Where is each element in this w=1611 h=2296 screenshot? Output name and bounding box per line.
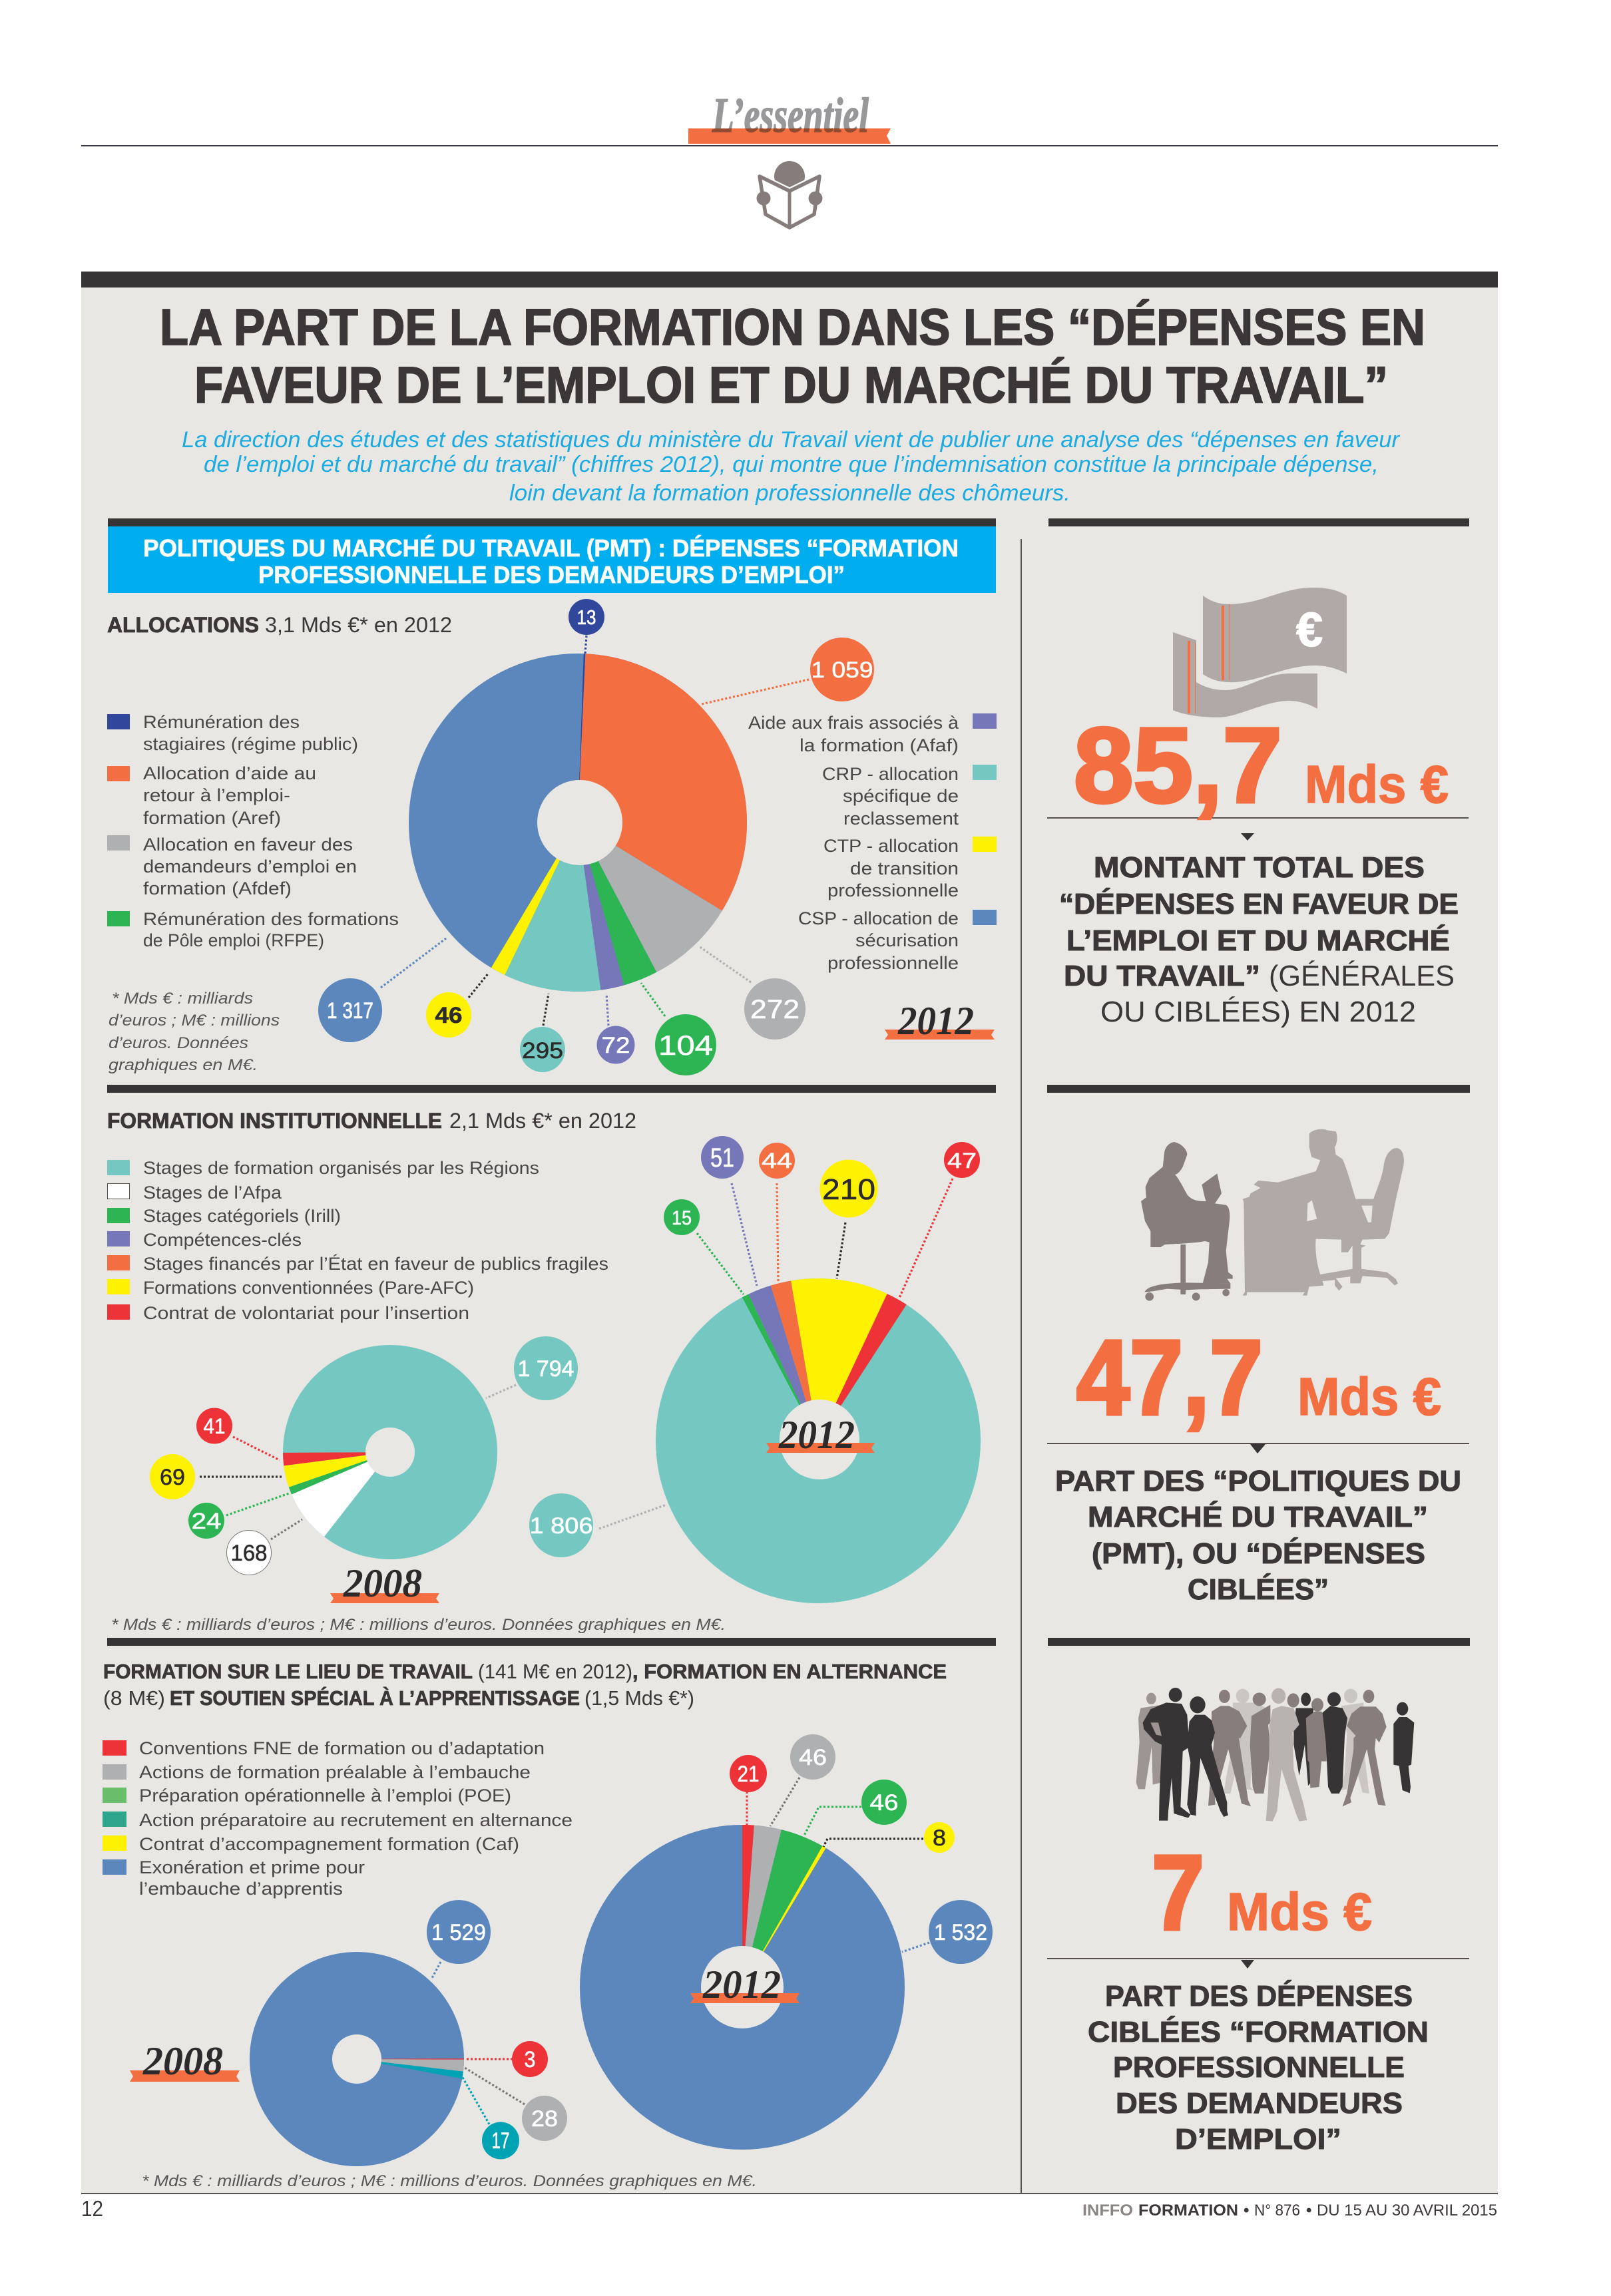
column divider — [1021, 539, 1022, 2193]
text: montant total — [1059, 851, 1459, 1028]
heading: formation sur le lieu de travail: (141 M€ en 2012) — [478, 1660, 632, 1683]
bubble: 8 — [823, 1822, 955, 1853]
footnote: allocations: d’euros ; M€ : millions — [109, 1012, 280, 1030]
bubble: 17 — [462, 2076, 519, 2159]
text: part des PMT: (PMT), OU “DÉPENSES — [1092, 1537, 1425, 1570]
bubble: 295: 295 — [522, 1038, 563, 1063]
intro text — [182, 427, 1401, 506]
legend: allocations right: professionnelle — [827, 880, 959, 900]
bubble: 15: 15 — [672, 1207, 692, 1229]
bubble: 46 green: 46 — [869, 1790, 899, 1816]
bubble: 1 532: 1 532 — [934, 1920, 987, 1945]
bubble: 13 — [569, 599, 604, 654]
bubble: 3 — [465, 2041, 548, 2077]
text: part des dépenses ciblées: PROFESSIONNELLE — [1113, 2051, 1405, 2084]
bubble: 46 grey: 46 — [799, 1745, 827, 1770]
footnote: institutionnelle: * Mds € : milliards d’euros ; M€ : millions d’euros. Données graphiques en M€. — [111, 1616, 726, 1634]
pie chart: formation institutionnelle 2012 — [656, 1278, 981, 1603]
bubble: 295 — [520, 994, 565, 1072]
legend: allocations right: CTP - allocation — [823, 836, 959, 856]
legend: formation institutionnelle: Stages financés par l’État en faveur de publics fragiles — [143, 1254, 608, 1274]
big number: 85,7 Mds €: Mds € — [1305, 755, 1449, 814]
heading: formation institutionnelle: FORMATION INSTITUTIONNELLE — [107, 1109, 442, 1133]
year tag: 2008 institutionnelle: 2008 — [343, 1561, 422, 1605]
bubble: 44: 44 — [762, 1149, 792, 1173]
icon: reader with open book — [756, 161, 823, 228]
legend: allocations right — [748, 713, 997, 973]
banner: politiques du marché du travail: PROFESSIONNELLE DES DEMANDEURS D’EMPLOI” — [258, 561, 845, 588]
page number: 12 — [81, 2196, 103, 2221]
text: part des PMT: MARCHÉ DU TRAVAIL” — [1088, 1500, 1428, 1533]
pie chart: lieu de travail 2012 — [580, 1825, 905, 2150]
legend: allocations left — [107, 712, 399, 950]
text: montant total: (GÉNÉRALES — [1269, 960, 1455, 992]
bubble: 1 529 — [427, 1900, 491, 1979]
heading: allocations — [107, 613, 452, 637]
legend: allocations right: Aide aux frais associés à — [748, 713, 959, 733]
bubble: 28 — [465, 2068, 567, 2141]
heading: formation sur le lieu de travail: , FORMATION EN ALTERNANCE — [632, 1660, 947, 1683]
text: part des dépenses ciblées: D’EMPLOI” — [1175, 2123, 1341, 2156]
bubble: 1 529: 1 529 — [431, 1920, 486, 1945]
bubble: 72 — [596, 994, 635, 1063]
bubble: 24 — [188, 1493, 289, 1539]
bubble: 47 — [899, 1142, 980, 1298]
bubble: 272: 272 — [750, 995, 800, 1024]
bubble: 168 — [226, 1519, 302, 1575]
big number: 7 Mds € — [1047, 1833, 1469, 1969]
legend: lieu de travail: Préparation opérationnelle à l’emploi (POE) — [139, 1786, 511, 1806]
legend: lieu de travail — [103, 1738, 573, 1899]
legend: allocations right: reclassement — [843, 809, 959, 829]
text: part des PMT — [1055, 1465, 1461, 1606]
footnote: allocations: graphiques en M€. — [109, 1056, 258, 1074]
bubble: 1 532 — [902, 1900, 993, 1964]
bubble: 3: 3 — [525, 2047, 535, 2072]
footer: issue line: N° 876 — [1254, 2201, 1300, 2219]
big number: 7 Mds €: 7 — [1152, 1833, 1204, 1952]
bubble: 46 green — [804, 1780, 907, 1835]
legend: allocations left: Rémunération des formations — [143, 909, 399, 929]
legend: allocations right: de transition — [850, 859, 959, 878]
bubble: 69: 69 — [160, 1465, 185, 1490]
bubble: 210 — [820, 1159, 877, 1278]
text: part des PMT: CIBLÉES” — [1188, 1573, 1329, 1606]
bubble: 272 — [699, 946, 806, 1040]
legend: lieu de travail: l’embauche d’apprentis — [139, 1879, 343, 1899]
panel: grey background with top bar — [81, 272, 1498, 2194]
legend: allocations left: Rémunération des — [143, 712, 300, 732]
text: part des dépenses ciblées: DES DEMANDEURS — [1116, 2087, 1403, 2120]
legend: allocations right: CSP - allocation de — [798, 908, 959, 928]
legend: formation institutionnelle: Stages de l’Afpa — [143, 1183, 282, 1203]
text: part des PMT: PART DES “POLITIQUES DU — [1055, 1465, 1461, 1497]
section bars — [107, 518, 1470, 1646]
bubble: 17: 17 — [491, 2128, 510, 2154]
big number: 85,7 Mds €: 85,7 — [1074, 705, 1282, 825]
bubble: 104 — [641, 983, 716, 1075]
icon: crowd silhouettes — [1136, 1688, 1414, 1821]
intro text: La direction des études et des statistiques du ministère du Travail vient de publier une analyse des “dépenses en faveur — [182, 427, 1401, 453]
bubble: 1 806: 1 806 — [530, 1513, 592, 1539]
bubble: 15 — [664, 1199, 744, 1294]
heading: formation institutionnelle — [107, 1109, 636, 1133]
year tag: 2012 allocations: 2012 — [897, 999, 974, 1043]
legend: allocations left: demandeurs d’emploi en — [143, 857, 357, 876]
bubble: 1 317 — [318, 938, 446, 1042]
footer: issue line: FORMATION — [1138, 2201, 1238, 2219]
footer: issue line: DU 15 AU 30 AVRIL 2015 — [1317, 2201, 1497, 2219]
text: part des dépenses ciblées — [1088, 1979, 1429, 2156]
text: montant total: MONTANT TOTAL DES — [1094, 851, 1425, 884]
heading: formation sur le lieu de travail — [103, 1660, 947, 1710]
legend: formation institutionnelle: Stages de formation organisés par les Régions — [143, 1158, 539, 1178]
big number: 47,7 Mds € — [1047, 1318, 1469, 1453]
legend: allocations left: formation (Aref) — [143, 808, 281, 828]
banner: politiques du marché du travail — [108, 518, 996, 593]
legend: formation institutionnelle — [107, 1158, 608, 1323]
bubble: 41: 41 — [204, 1414, 225, 1438]
bubble: 44 — [759, 1143, 795, 1281]
legend: allocations right: la formation (Afaf) — [800, 735, 959, 755]
footnote: lieu de travail: * Mds € : milliards d’euros ; M€ : millions d’euros. Données graphiques en M€. — [142, 2172, 757, 2190]
text: part des dépenses ciblées: CIBLÉES “FORMATION — [1088, 2015, 1429, 2048]
bubble: 46: 46 — [435, 1003, 462, 1028]
bubble: 47: 47 — [947, 1149, 977, 1173]
icon: euro banknotes: € — [1296, 604, 1323, 657]
bubble: 210: 210 — [822, 1173, 875, 1206]
year tag: 2012 lieu de travail: 2012 — [702, 1963, 781, 2007]
footer: issue line — [1082, 2201, 1497, 2219]
icon: euro banknotes — [1173, 588, 1347, 717]
footer: issue line: • — [1306, 2201, 1311, 2219]
legend: lieu de travail: Actions de formation préalable à l’embauche — [139, 1762, 531, 1782]
footnote: allocations: d’euros. Données — [109, 1034, 248, 1052]
footer: issue line: • — [1244, 2201, 1249, 2219]
bubble: 21 — [730, 1755, 767, 1825]
legend: formation institutionnelle: Compétences-clés — [143, 1230, 302, 1250]
title — [160, 299, 1425, 414]
legend: allocations left: retour à l’emploi- — [143, 785, 290, 805]
text: montant total: “DÉPENSES EN FAVEUR DE — [1059, 887, 1459, 920]
big number: 7 Mds €: Mds € — [1227, 1882, 1372, 1941]
text: montant total: DU TRAVAIL” — [1064, 960, 1260, 992]
bubble: 13: 13 — [576, 606, 596, 629]
bubble: 1 059: 1 059 — [811, 658, 873, 683]
legend: allocations right: CRP - allocation — [822, 764, 959, 784]
year tag: 2012 institutionnelle: 2012 — [778, 1413, 855, 1457]
heading: formation sur le lieu de travail: ET SOUTIEN SPÉCIAL À L’APPRENTISSAGE — [170, 1686, 580, 1710]
text: montant total: L’EMPLOI ET DU MARCHÉ — [1066, 924, 1450, 957]
intro text: loin devant la formation professionnelle des chômeurs. — [509, 480, 1070, 506]
legend: allocations right: spécifique de — [843, 786, 959, 806]
legend: allocations right: sécurisation — [855, 930, 959, 950]
bubble: 51 — [701, 1136, 757, 1286]
heading: allocations: 3,1 Mds €* en 2012 — [265, 613, 452, 637]
footer: issue line: INFFO — [1082, 2201, 1133, 2219]
bubble: 41 — [196, 1408, 280, 1460]
bubble: 8: 8 — [933, 1825, 946, 1851]
bubble: 1 059 — [702, 638, 874, 704]
big number: 47,7 Mds €: Mds € — [1297, 1367, 1441, 1426]
heading: formation institutionnelle: 2,1 Mds €* en 2012 — [449, 1109, 636, 1133]
bubble: 46 grey — [770, 1734, 835, 1826]
legend: formation institutionnelle: Contrat de volontariat pour l’insertion — [143, 1303, 469, 1323]
legend: allocations left: stagiaires (régime public) — [143, 734, 358, 754]
heading: allocations: ALLOCATIONS — [107, 613, 259, 637]
intro text: de l’emploi et du marché du travail” (chiffres 2012), qui montre que l’indemnisation constitue la principale dépense, — [204, 452, 1379, 477]
title: LA PART DE LA FORMATION DANS LES “DÉPENSES EN — [160, 299, 1425, 356]
bubble: 72: 72 — [602, 1033, 630, 1058]
bubble: 1 794: 1 794 — [518, 1356, 574, 1382]
title: FAVEUR DE L’EMPLOI ET DU MARCHÉ DU TRAVAIL” — [194, 357, 1388, 414]
legend: lieu de travail: Contrat d’accompagnement formation (Caf) — [139, 1834, 519, 1854]
big number: 85,7 Mds € — [1047, 705, 1469, 841]
legend: lieu de travail: Action préparatoire au recrutement en alternance — [139, 1810, 573, 1830]
legend: allocations right: professionnelle — [827, 953, 959, 973]
banner: politiques du marché du travail: POLITIQUES DU MARCHÉ DU TRAVAIL (PMT) : DÉPENSES “FORMATION — [143, 534, 959, 562]
bubble: 21: 21 — [738, 1762, 759, 1787]
bubble: 28: 28 — [531, 2106, 558, 2132]
bubble: 46 — [426, 973, 489, 1038]
bubble: 69 — [150, 1454, 282, 1499]
year tag: 2008 lieu de travail: 2008 — [142, 2039, 223, 2083]
text: montant total: OU CIBLÉES) EN 2012 — [1100, 996, 1416, 1028]
legend: allocations left: de Pôle emploi (RFPE) — [143, 930, 324, 950]
footnote: allocations: * Mds € : milliards — [112, 990, 253, 1008]
bubble: 1 317: 1 317 — [327, 998, 373, 1024]
pie chart: lieu de travail 2008 — [250, 1952, 464, 2166]
heading: formation sur le lieu de travail: (8 M€) — [103, 1686, 165, 1710]
legend: allocations left: Allocation en faveur des — [143, 835, 353, 855]
bubble: 168: 168 — [230, 1541, 268, 1566]
legend: lieu de travail: Conventions FNE de formation ou d’adaptation — [139, 1738, 545, 1758]
text: part des dépenses ciblées: PART DES DÉPENSES — [1105, 1979, 1413, 2012]
section header: L'essentiel: L’essentiel — [712, 89, 869, 143]
legend: lieu de travail: Exonération et prime pour — [139, 1857, 365, 1877]
heading: formation sur le lieu de travail: (1,5 Mds €*) — [584, 1686, 694, 1710]
legend: allocations left: formation (Afdef) — [143, 878, 292, 898]
legend: formation institutionnelle: Formations conventionnées (Pare-AFC) — [143, 1278, 474, 1298]
icon: job interview silhouettes — [1141, 1129, 1404, 1301]
legend: formation institutionnelle: Stages catégoriels (Irill) — [143, 1206, 341, 1226]
big number: 47,7 Mds €: 47,7 — [1076, 1318, 1263, 1437]
bubble: 24: 24 — [192, 1509, 221, 1534]
section header: L'essentiel — [81, 89, 1498, 146]
heading: formation sur le lieu de travail: FORMATION SUR LE LIEU DE TRAVAIL — [103, 1660, 473, 1683]
pie chart: formation institutionnelle 2008 — [283, 1345, 497, 1559]
bubble: 104: 104 — [658, 1030, 713, 1061]
footnote: allocations — [109, 990, 280, 1074]
bubble: 1 806 — [529, 1493, 666, 1557]
legend: allocations left: Allocation d’aide au — [143, 763, 316, 783]
bubble: 51: 51 — [710, 1143, 734, 1173]
bubble: 1 794 — [486, 1336, 578, 1400]
pie chart: allocations 2012 — [409, 654, 747, 992]
